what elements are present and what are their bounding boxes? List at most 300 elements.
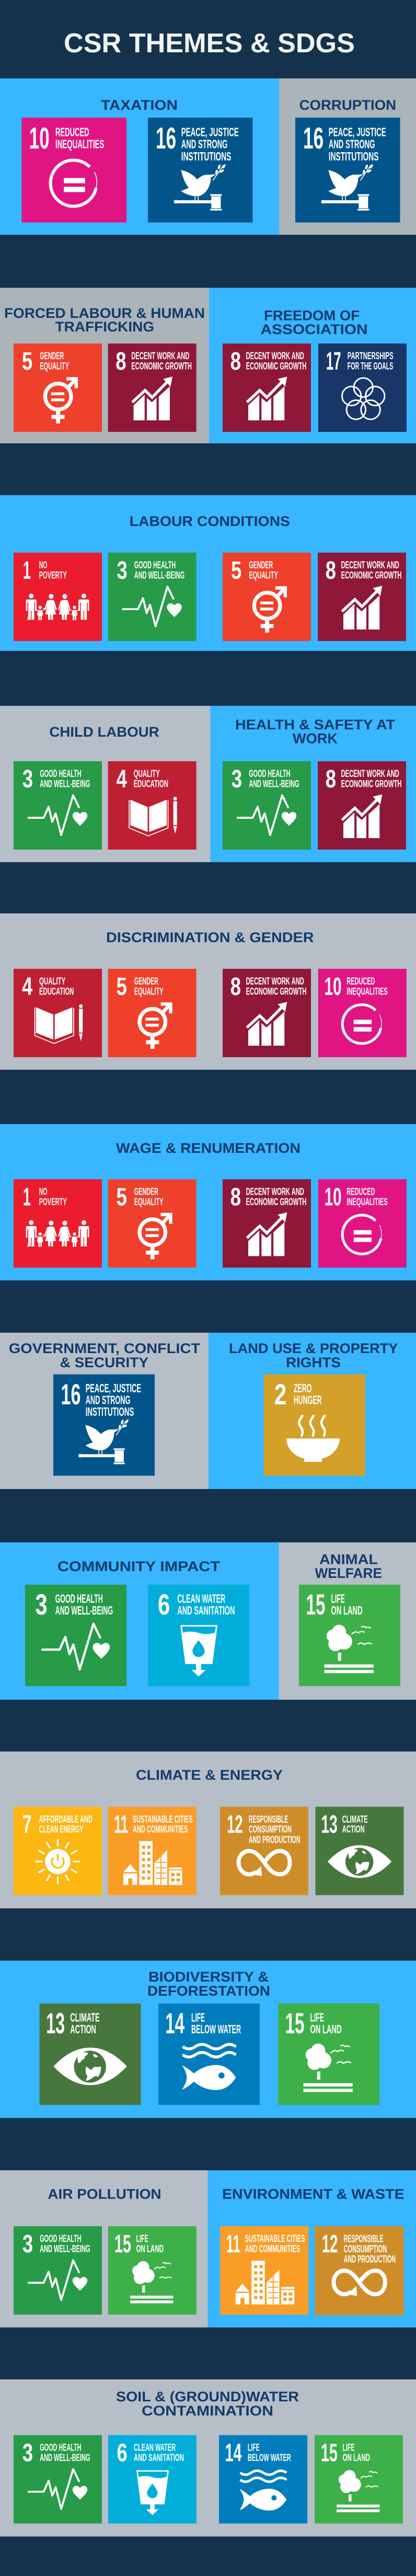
heading: land use and property rights: LAND USE & PROPERTY: [229, 1341, 398, 1356]
goal number: 1: [23, 1183, 31, 1211]
goal name: AND SANITATION: [134, 2452, 184, 2464]
goal name: [39, 1814, 93, 1835]
goal name: HUNGER: [294, 1393, 322, 1406]
heading: soil and groundwater contamination: [116, 2389, 299, 2419]
tile: goal 12 responsible consumption: [220, 1807, 308, 1895]
heading: land use and property rights: RIGHTS: [286, 1355, 341, 1370]
goal number: 12: [322, 2230, 338, 2258]
heading: animal welfare: WELFARE: [315, 1565, 382, 1581]
tile: goal 3 good health: [14, 761, 102, 850]
panel: labour conditions: [0, 495, 416, 651]
goal name: AND COMMUNITIES: [245, 2243, 300, 2255]
icon: dove and gavel: [321, 164, 374, 211]
goal name: AND SANITATION: [177, 1604, 235, 1617]
heading: freedom of association: [260, 307, 368, 337]
goal name: EQUALITY: [134, 1196, 164, 1208]
goal name: [348, 350, 394, 372]
panel: community impact: [0, 1542, 279, 1700]
panel: taxation: [0, 78, 279, 235]
goal name: EQUALITY: [134, 986, 164, 998]
goal name: ACTION: [70, 2022, 96, 2036]
goal number: 16: [303, 122, 323, 155]
goal name: [331, 1592, 363, 1617]
tile: goal 17 partnerships: [318, 344, 407, 432]
goal number: 15: [114, 2230, 131, 2258]
tile: goal 8 decent work: [223, 1180, 311, 1267]
icon: heart pulse: [29, 2469, 87, 2509]
tile: goal 10 reduced inequalities: [318, 969, 407, 1057]
icon: five rings: [342, 378, 385, 419]
icon: heart pulse: [123, 587, 182, 626]
goal number: 13: [46, 2007, 65, 2040]
tile: goal 14 life below water: [219, 2435, 307, 2524]
goal name: GENDER: [249, 559, 273, 571]
goal number: 8: [115, 347, 126, 375]
icon: infinity loop: [238, 1851, 290, 1876]
tile: goal 3 good health: [223, 761, 311, 850]
goal name: QUALITY: [134, 768, 160, 780]
goal name: AND WELL-BEING: [134, 570, 184, 581]
icon: dove and gavel: [78, 1419, 129, 1464]
goal name: [343, 2442, 370, 2464]
heading: forced labour: [4, 305, 205, 335]
heading: government, conflict and security: GOVERNMENT, CONFLICT: [9, 1341, 201, 1356]
heading: forced labour: TRAFFICKING: [55, 319, 154, 335]
panel: air pollution: [0, 2170, 208, 2328]
heading: biodiversity and deforestation: BIODIVERSITY &: [148, 1969, 269, 1985]
goal number: 13: [321, 1811, 338, 1839]
goal name: [136, 2233, 164, 2255]
tile: goal 8 decent work: [108, 344, 197, 432]
tile: goal 3 good health: [108, 553, 197, 641]
icon: city buildings: [123, 1841, 182, 1885]
goal number: 8: [230, 347, 241, 375]
heading: freedom of association: ASSOCIATION: [260, 322, 368, 337]
goal name: [329, 125, 386, 163]
goal name: [133, 1814, 193, 1835]
heading: forced labour: FORCED LABOUR & HUMAN: [4, 305, 205, 321]
icon: eye and globe: [53, 2047, 127, 2085]
goal name: [181, 125, 239, 163]
heading: biodiversity and deforestation: DEFORESTATION: [147, 1983, 270, 1999]
goal name: EQUALITY: [249, 570, 278, 581]
goal name: [40, 2233, 90, 2255]
heading: government, conflict and security: & SECURITY: [60, 1355, 148, 1370]
goal number: 15: [321, 2438, 338, 2467]
icon: equality ring: [342, 1215, 382, 1254]
goal name: POVERTY: [39, 570, 67, 581]
goal name: LIFE: [310, 2011, 324, 2024]
tile: goal 14 life below water: [158, 2003, 260, 2105]
goal name: CLEAN ENERGY: [39, 1824, 83, 1835]
goal name: [39, 559, 67, 581]
goal name: [40, 2442, 90, 2464]
icon: tree and birds: [130, 2261, 173, 2303]
panel: forced labour and human trafficking: [0, 288, 209, 443]
panel: government, conflict and security: [0, 1333, 209, 1489]
goal number: 8: [230, 972, 241, 1001]
panel: health and safety at work: [210, 706, 416, 862]
heading: child labour: CHILD LABOUR: [49, 724, 159, 740]
goal name: AND STRONG: [329, 138, 375, 151]
goal name: ECONOMIC GROWTH: [246, 986, 306, 998]
goal name: [134, 976, 164, 998]
goal number: 10: [29, 122, 50, 155]
goal number: 8: [326, 556, 336, 585]
icon: growth chart: [247, 1212, 287, 1256]
goal name: AND STRONG: [181, 138, 227, 151]
goal name: NO: [39, 1186, 47, 1198]
goal name: SUSTAINABLE CITIES: [245, 2233, 305, 2245]
goal name: DECENT WORK AND: [246, 976, 304, 987]
goal name: [294, 1381, 322, 1406]
panel: animal welfare: [279, 1542, 416, 1700]
goal name: GOOD HEALTH: [134, 559, 176, 571]
goal name: SUSTAINABLE CITIES: [133, 1814, 193, 1825]
goal name: PEACE, JUSTICE: [181, 125, 239, 139]
goal number: 7: [22, 1811, 32, 1839]
heading: land use and property rights: [229, 1341, 398, 1370]
goal name: [134, 1186, 164, 1208]
goal name: REDUCED: [55, 125, 89, 139]
goal name: [346, 976, 388, 998]
icon: tree and birds: [303, 2044, 353, 2092]
tile: goal 6 clean water: [148, 1585, 249, 1686]
goal name: [245, 2233, 305, 2255]
goal number: 12: [227, 1811, 243, 1839]
goal name: INEQUALITIES: [55, 138, 104, 151]
heading: soil and groundwater contamination: SOIL & (GROUND)WATER: [116, 2389, 299, 2405]
goal name: [55, 1592, 113, 1617]
icon: tree and birds: [324, 1625, 374, 1673]
goal number: 6: [158, 1588, 170, 1621]
heading: labour conditions: LABOUR CONDITIONS: [130, 513, 290, 529]
goal name: AND WELL-BEING: [40, 2243, 90, 2255]
icon: gender symbol: [140, 1002, 172, 1049]
goal number: 3: [35, 1588, 48, 1621]
goal name: GOOD HEALTH: [40, 2442, 82, 2454]
goal name: GENDER: [134, 1186, 158, 1198]
heading: taxation: TAXATION: [101, 97, 178, 113]
goal name: [310, 2011, 342, 2036]
goal number: 11: [226, 2230, 240, 2258]
goal number: 16: [61, 1378, 80, 1411]
goal number: 3: [22, 2230, 33, 2258]
goal name: EQUALITY: [40, 361, 69, 372]
goal name: AND WELL-BEING: [40, 2452, 90, 2464]
goal name: CLEAN WATER: [177, 1592, 225, 1606]
icon: city buildings: [236, 2261, 294, 2305]
goal name: GENDER: [134, 976, 158, 987]
heading: health and safety: WORK: [293, 731, 338, 747]
goal name: CONSUMPTION: [249, 1824, 292, 1835]
goal name: ZERO: [294, 1381, 311, 1395]
tile: goal 5 gender equality: [108, 1180, 197, 1267]
tile: goal 3 good health: [14, 2435, 102, 2524]
goal name: LIFE: [136, 2233, 148, 2245]
goal name: [341, 559, 401, 581]
goal name: EDUCATION: [39, 986, 74, 998]
goal name: [344, 2233, 396, 2265]
goal name: GOOD HEALTH: [40, 2233, 82, 2245]
icon: eye and globe: [328, 1845, 391, 1878]
goal number: 3: [22, 2438, 33, 2467]
goal name: GOOD HEALTH: [55, 1592, 103, 1606]
goal name: INSTITUTIONS: [329, 150, 378, 163]
icon: growth chart: [342, 586, 382, 629]
goal name: [131, 350, 192, 372]
goal name: LIFE: [248, 2442, 260, 2454]
goal number: 5: [117, 1183, 127, 1211]
tile: goal 2 zero hunger: [264, 1375, 365, 1476]
tile: goal 12 responsible consumption: [315, 2226, 404, 2315]
tile: goal 8 decent work: [223, 969, 311, 1057]
tile: goal 8 decent work: [223, 344, 311, 432]
tile: goal 6 clean water: [108, 2435, 197, 2524]
panel: environment and waste: [208, 2170, 416, 2328]
tile: goal 10 reduced inequalities: [318, 1180, 407, 1267]
heading: community impact: COMMUNITY IMPACT: [57, 1559, 221, 1574]
goal number: 8: [230, 1183, 241, 1211]
heading: environment and waste: ENVIRONMENT & WASTE: [222, 2186, 405, 2202]
tile: goal 13 climate action: [40, 2003, 141, 2105]
goal name: [248, 2442, 291, 2464]
goal name: [134, 559, 184, 581]
goal name: [249, 768, 299, 790]
icon: sun power: [36, 1840, 79, 1883]
icon: equality ring: [342, 1005, 382, 1044]
goal name: GOOD HEALTH: [249, 768, 291, 780]
goal number: 10: [325, 972, 342, 1001]
goal number: 15: [306, 1588, 325, 1621]
goal number: 6: [117, 2438, 128, 2467]
goal name: BELOW WATER: [248, 2452, 291, 2464]
icon: water glass: [181, 1626, 217, 1677]
goal name: AND STRONG: [86, 1393, 130, 1406]
tile: goal 7 clean energy: [14, 1807, 102, 1895]
heading: discrimination and gender: DISCRIMINATION & GENDER: [106, 930, 314, 945]
tile: goal 4 quality education: [14, 969, 102, 1057]
panel: land use and property rights: [209, 1333, 416, 1489]
heading: climate and energy: CLIMATE & ENERGY: [136, 1767, 283, 1783]
panel: biodiversity and deforestation: [0, 1961, 416, 2118]
goal name: DECENT WORK AND: [131, 350, 189, 362]
goal name: ECONOMIC GROWTH: [131, 361, 192, 372]
heading: freedom of association: FREEDOM OF: [264, 307, 360, 323]
goal name: GENDER: [40, 350, 64, 362]
icon: family: [26, 593, 89, 620]
goal name: [341, 768, 401, 790]
panel: wage and renumeration: [0, 1124, 416, 1280]
icon: waves and fish: [240, 2471, 286, 2511]
goal name: [177, 1592, 235, 1617]
goal number: 14: [165, 2007, 184, 2040]
tile: goal 3 good health: [14, 2226, 102, 2315]
goal name: ACTION: [342, 1824, 365, 1835]
heading: animal welfare: ANIMAL: [319, 1551, 378, 1567]
icon: heart pulse: [238, 795, 296, 835]
icon: family: [26, 1220, 89, 1247]
goal name: [249, 559, 278, 581]
heading: health and safety: [235, 717, 396, 747]
goal name: LIFE: [191, 2011, 205, 2024]
goal number: 3: [117, 556, 128, 585]
goal name: AFFORDABLE AND: [39, 1814, 93, 1825]
goal number: 16: [156, 122, 176, 155]
goal name: [70, 2011, 100, 2036]
goal number: 1: [23, 556, 31, 585]
heading: government, conflict and security: [9, 1341, 201, 1370]
goal name: [246, 1186, 306, 1208]
goal number: 17: [326, 347, 341, 375]
goal name: INSTITUTIONS: [181, 150, 231, 163]
heading: biodiversity and deforestation: [147, 1969, 270, 1999]
icon: steaming bowl: [286, 1416, 340, 1462]
goal name: CLIMATE: [70, 2011, 100, 2024]
goal name: [342, 1814, 368, 1835]
goal name: AND COMMUNITIES: [133, 1824, 188, 1835]
tile: goal 3 good health: [25, 1585, 126, 1686]
icon: water glass: [137, 2471, 168, 2515]
tile: goal 16 peace justice: [148, 118, 253, 223]
heading: animal welfare: [315, 1551, 382, 1581]
goal name: QUALITY: [39, 976, 65, 987]
goal name: [134, 2442, 184, 2464]
goal name: [346, 1186, 388, 1208]
panel: soil and groundwater contamination: [0, 2379, 416, 2537]
panel: discrimination and gender: [0, 913, 416, 1070]
goal number: 10: [325, 1183, 342, 1211]
goal name: GOOD HEALTH: [40, 768, 82, 780]
goal number: 3: [232, 765, 242, 793]
goal name: NO: [39, 559, 47, 571]
goal name: [39, 976, 74, 998]
goal number: 5: [117, 972, 127, 1001]
goal name: AND WELL-BEING: [55, 1604, 113, 1617]
tile: goal 10 reduced inequalities: [22, 118, 126, 223]
goal name: RESPONSIBLE: [249, 1814, 288, 1825]
icon: gender symbol: [254, 586, 287, 633]
goal name: LIFE: [331, 1592, 345, 1606]
icon: growth chart: [247, 376, 287, 420]
heading: corruption: CORRUPTION: [299, 97, 396, 113]
goal name: ECONOMIC GROWTH: [246, 1196, 306, 1208]
tile: goal 4 quality education: [108, 761, 197, 850]
goal name: POVERTY: [39, 1196, 67, 1208]
icon: heart pulse: [29, 795, 87, 835]
tile: goal 15 life on land: [108, 2226, 197, 2315]
goal name: CLEAN WATER: [134, 2442, 176, 2454]
goal name: [55, 125, 104, 151]
tile: goal 5 gender equality: [14, 344, 102, 432]
goal name: [246, 976, 306, 998]
icon: growth chart: [132, 376, 172, 420]
icon: book and pencil: [129, 797, 177, 836]
goal name: [40, 350, 69, 372]
goal name: AND WELL-BEING: [249, 778, 299, 790]
panel: child labour: [0, 706, 210, 862]
heading: health and safety: HEALTH & SAFETY AT: [235, 717, 396, 732]
goal name: AND PRODUCTION: [249, 1834, 301, 1846]
goal name: [249, 1814, 301, 1846]
tile: goal 5 gender equality: [223, 553, 311, 641]
goal number: 15: [285, 2007, 304, 2040]
icon: heart pulse: [29, 2260, 87, 2300]
icon: waves and fish: [182, 2044, 236, 2090]
tile: goal 15 life on land: [278, 2003, 379, 2105]
goal number: 8: [326, 765, 336, 793]
tile: goal 13 climate action: [316, 1807, 403, 1895]
goal number: 3: [22, 765, 33, 793]
goal name: ON LAND: [136, 2243, 164, 2255]
tile: goal 16 peace justice: [53, 1375, 155, 1476]
tile: goal 5 gender equality: [108, 969, 197, 1057]
icon: growth chart: [342, 794, 382, 838]
title: CSR THEMES & SDGS: [64, 28, 355, 59]
goal name: [134, 768, 168, 790]
tile: goal 15 life on land: [315, 2435, 403, 2524]
tile: goal 11 sustainable cities: [108, 1807, 197, 1895]
icon: dove and gavel: [174, 164, 226, 211]
goal name: DECENT WORK AND: [246, 1186, 304, 1198]
goal name: EDUCATION: [134, 778, 168, 790]
icon: gender symbol: [45, 377, 78, 423]
tile: goal 8 decent work: [318, 761, 406, 850]
goal name: BELOW WATER: [191, 2022, 241, 2036]
tile: goal 16 peace justice: [295, 118, 400, 223]
goal name: ON LAND: [310, 2022, 342, 2036]
goal number: 11: [114, 1811, 128, 1839]
tile: goal 11 sustainable cities: [220, 2226, 308, 2315]
panel: freedom of association: [209, 288, 416, 443]
icon: equality ring: [51, 160, 97, 207]
goal name: LIFE: [343, 2442, 355, 2454]
heading: air pollution: AIR POLLUTION: [48, 2186, 161, 2202]
goal name: AND WELL-BEING: [40, 778, 90, 790]
tile: goal 15 life on land: [299, 1585, 400, 1686]
icon: growth chart: [247, 1002, 287, 1046]
goal name: [40, 768, 90, 790]
goal name: CLIMATE: [342, 1814, 368, 1825]
goal name: [86, 1381, 141, 1418]
panel: corruption: [279, 78, 416, 235]
icon: book and pencil: [35, 1004, 83, 1044]
heading: soil and groundwater contamination: CONTAMINATION: [142, 2403, 273, 2419]
goal name: PEACE, JUSTICE: [86, 1381, 141, 1395]
goal name: ON LAND: [331, 1604, 363, 1617]
goal name: RESPONSIBLE: [344, 2233, 384, 2245]
goal number: 5: [22, 347, 32, 375]
goal number: 4: [117, 765, 127, 793]
tile: goal 1 no poverty: [14, 1180, 102, 1267]
icon: heart pulse: [42, 1624, 110, 1669]
icon: infinity loop: [333, 2271, 385, 2296]
tile: goal 1 no poverty: [14, 553, 102, 641]
tile: goal 8 decent work: [318, 553, 406, 641]
goal number: 4: [22, 972, 32, 1001]
goal name: REDUCED: [346, 976, 375, 987]
goal number: 5: [231, 556, 241, 585]
goal name: ON LAND: [343, 2452, 370, 2464]
goal name: [191, 2011, 241, 2036]
goal name: [246, 350, 306, 372]
goal name: DECENT WORK AND: [246, 350, 304, 362]
goal name: [39, 1186, 67, 1208]
panel: climate and energy: [0, 1751, 416, 1908]
icon: tree and birds: [337, 2470, 379, 2512]
icon: gender symbol: [140, 1213, 172, 1259]
goal name: ECONOMIC GROWTH: [246, 361, 306, 372]
